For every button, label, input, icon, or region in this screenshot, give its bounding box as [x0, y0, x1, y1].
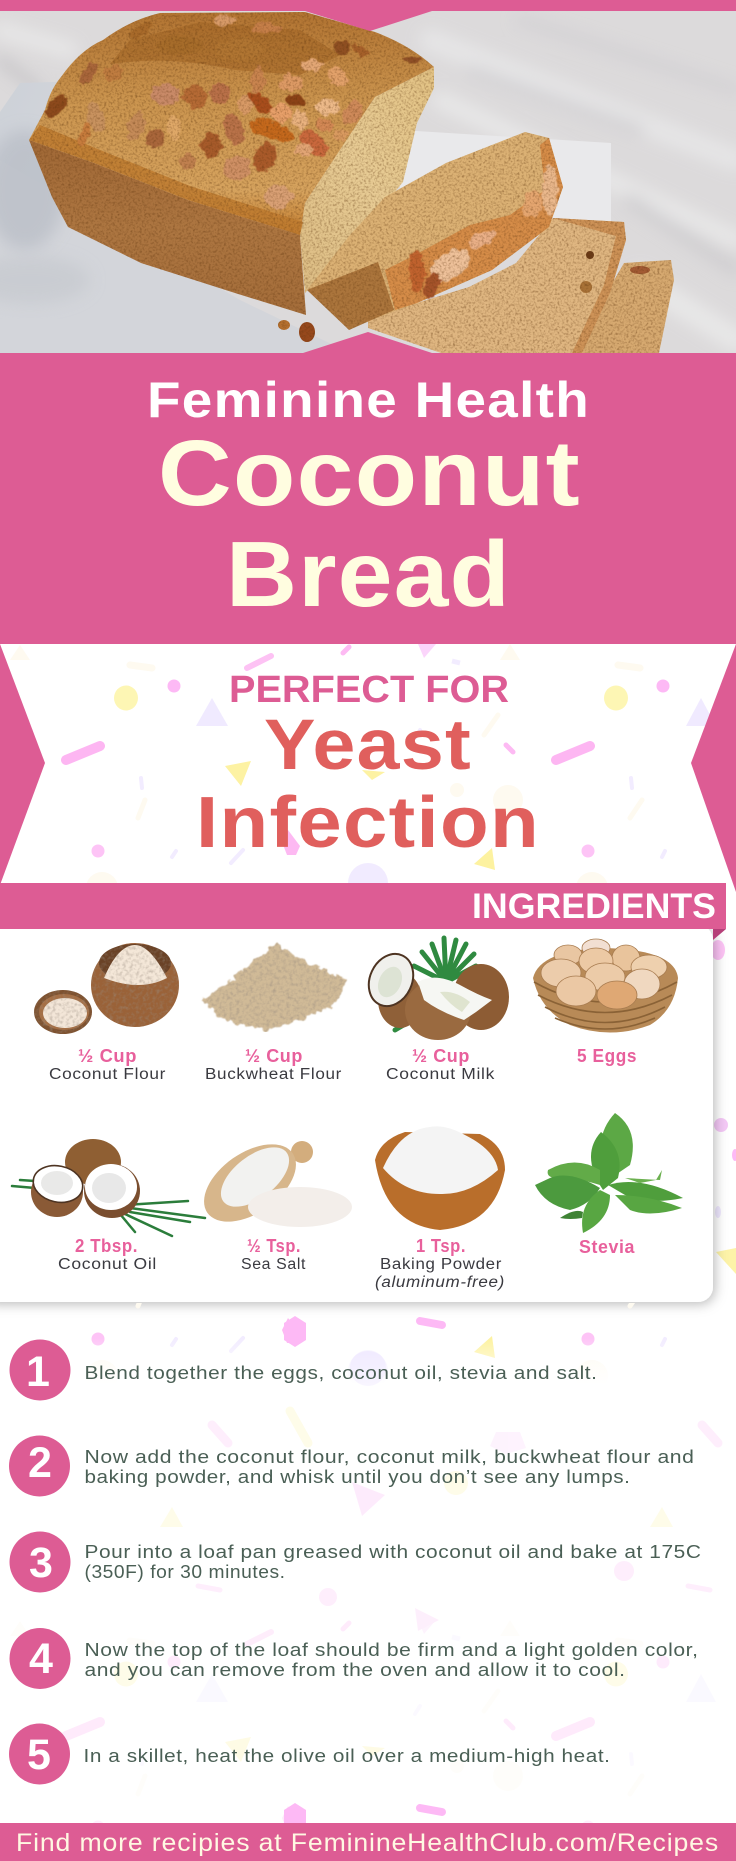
banner: perfect for yeast infection — [0, 644, 736, 904]
banner small heading: PERFECT FOR — [229, 669, 509, 711]
name: Coconut Milk — [386, 1066, 495, 1083]
ingredients header ribbon — [0, 883, 726, 940]
name: Coconut Oil — [58, 1256, 157, 1273]
step number — [10, 1340, 70, 1400]
hero photo: sliced coconut bread loaf — [0, 11, 736, 353]
name: Baking Powder — [380, 1256, 502, 1273]
ingredient: coconut flour — [34, 943, 179, 1083]
ingredient: coconut milk — [361, 938, 509, 1083]
side confetti near card — [711, 940, 736, 1274]
step number — [10, 1628, 70, 1689]
step 4 — [10, 1628, 698, 1689]
step 1: 1 — [26, 1348, 50, 1396]
icon: split coconuts and palm — [361, 938, 509, 1040]
parchment paper — [0, 80, 120, 353]
step 5: 5 — [27, 1731, 51, 1779]
marble background — [0, 11, 736, 353]
loaf golden top — [29, 12, 434, 235]
name: Coconut Flour — [49, 1066, 166, 1083]
crumbs — [278, 320, 290, 330]
icon: stevia leaves — [535, 1113, 683, 1233]
step text: Now the top of the loaf should be firm and a light golden color, — [84, 1640, 698, 1660]
step 2: 2 — [28, 1439, 52, 1487]
step 3: 3 — [29, 1539, 53, 1587]
step 1 — [10, 1340, 598, 1400]
far bread slice — [572, 260, 674, 353]
note: (aluminum-free) — [375, 1274, 505, 1291]
icon: coconut shells with flour — [34, 943, 179, 1034]
ingredient: eggs — [533, 939, 678, 1066]
steps background confetti — [10, 1350, 718, 1861]
ingredients card — [0, 925, 713, 1302]
title line 1: Feminine Health — [147, 372, 590, 428]
step 2: baking powder, and whisk until you don’t see any lumps. — [84, 1467, 630, 1487]
step number — [9, 1436, 70, 1496]
front bread slice — [307, 132, 563, 328]
footer bar — [0, 1823, 736, 1861]
step text: In a skillet, heat the olive oil over a medium-high heat. — [84, 1746, 610, 1766]
ingredient: baking powder — [375, 1126, 505, 1291]
step text: Now add the coconut flour, coconut milk, buckwheat flour and — [84, 1447, 694, 1467]
icon: coconut halves with palm leaf — [12, 1139, 205, 1236]
right ribbon tail — [691, 644, 736, 892]
title line 3: Bread — [226, 522, 511, 626]
title line 2: Coconut — [158, 421, 581, 525]
name: Sea Salt — [241, 1256, 306, 1273]
banner word Infection: Infection — [196, 783, 540, 863]
footer link text: Find more recipies at FeminineHealthClub.com/Recipes — [16, 1829, 719, 1857]
ingredient: sea salt — [190, 1129, 352, 1273]
ingredient: stevia — [535, 1113, 683, 1257]
icon: basket of eggs — [533, 939, 678, 1032]
step 3: (350F) for 30 minutes. — [84, 1562, 286, 1582]
amount: 2 Tbsp. — [75, 1236, 138, 1256]
step 4: and you can remove from the oven and allow it to cool. — [84, 1660, 626, 1680]
ingredient: buckwheat flour — [202, 943, 347, 1083]
step text: Pour into a loaf pan greased with coconut oil and bake at 175C — [84, 1542, 702, 1562]
amount: ½ Cup — [412, 1046, 470, 1066]
amount: ½ Cup — [245, 1046, 303, 1066]
icon: wooden scoop with salt — [190, 1129, 352, 1237]
loaf pan side crust — [29, 140, 306, 315]
step text: Blend together the eggs, coconut oil, stevia and salt. — [84, 1363, 598, 1383]
banner word Yeast: Yeast — [264, 706, 472, 785]
icon: wooden bowl of powder — [375, 1126, 505, 1230]
ribbon fold — [713, 929, 726, 940]
title panel — [0, 332, 736, 644]
icon: flour pile — [202, 943, 347, 1030]
upper steps confetti — [92, 1303, 667, 1366]
step 5 — [9, 1724, 610, 1784]
loaf cut face — [300, 67, 434, 293]
amount: ½ Cup — [78, 1046, 137, 1066]
middle bread slice — [368, 218, 626, 353]
step 3 — [10, 1532, 702, 1592]
left ribbon tail — [0, 644, 45, 885]
step number — [9, 1724, 70, 1784]
step 2 — [9, 1436, 694, 1496]
name: Buckwheat Flour — [205, 1066, 342, 1083]
amount: 1 Tsp. — [416, 1236, 466, 1256]
ingredients heading: INGREDIENTS — [472, 887, 716, 926]
step 4: 4 — [29, 1635, 53, 1683]
ingredient: coconut oil — [12, 1139, 205, 1273]
coconut flakes on loaf — [42, 14, 422, 209]
step number — [10, 1532, 70, 1592]
top pink ribbon with notch — [0, 0, 736, 31]
amount: 5 Eggs — [577, 1046, 637, 1066]
amount: ½ Tsp. — [247, 1236, 301, 1256]
amount: Stevia — [579, 1237, 635, 1257]
